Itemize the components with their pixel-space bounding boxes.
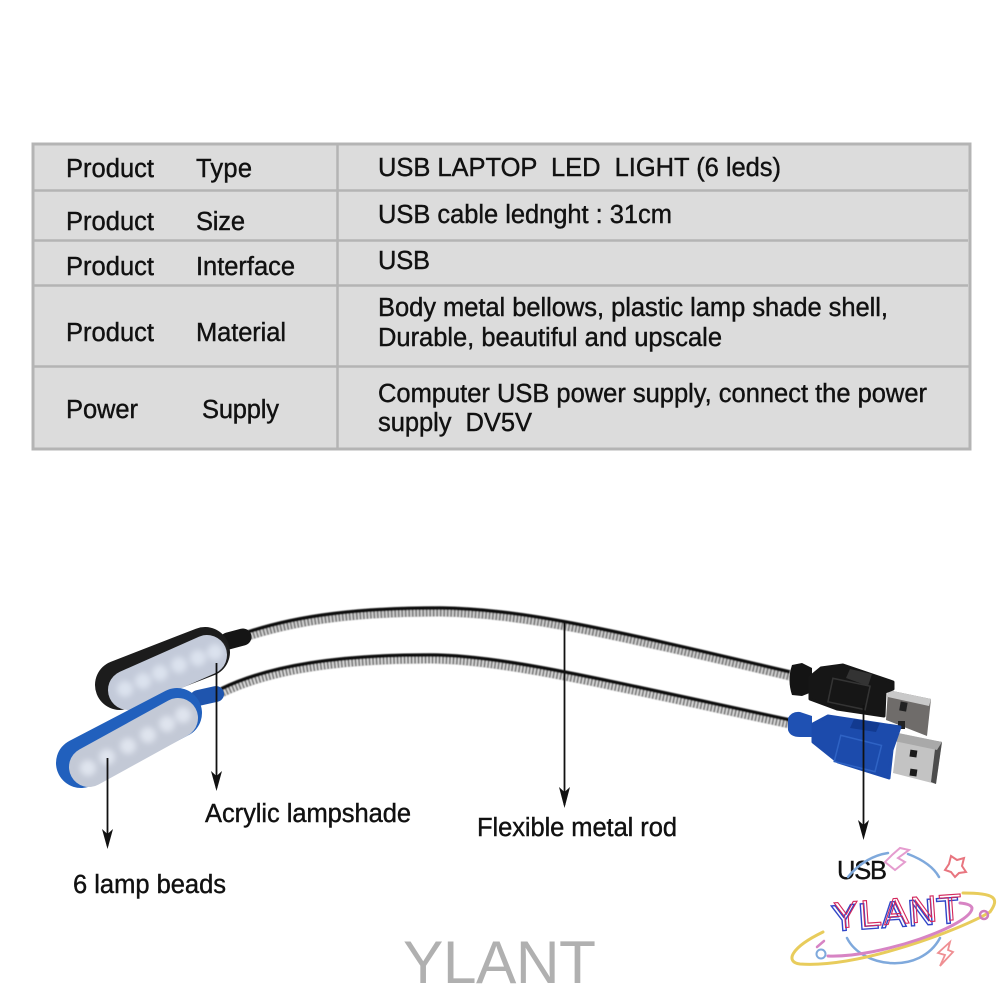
- row: power supply: supply DV5V: [378, 409, 532, 437]
- row: product interface: Interface: [196, 253, 295, 281]
- row: product type: Type: [196, 155, 252, 183]
- row: product material: Product: [66, 319, 154, 347]
- row: product type: USB LAPTOP LED LIGHT (6 leds): [378, 154, 781, 182]
- arrow: 6 lamp beads: [102, 758, 113, 849]
- logo orbit rings: [792, 893, 995, 964]
- row: power supply: Power: [66, 396, 138, 424]
- arrow: USB: [858, 705, 869, 840]
- label: USB: USB: [837, 857, 887, 885]
- row: power supply: [66, 380, 928, 437]
- black lamp head: [117, 637, 243, 697]
- row: product size: Product: [66, 208, 154, 236]
- row: product material: [66, 294, 888, 352]
- row: power supply: Supply: [202, 396, 279, 424]
- row: product interface: [66, 247, 430, 281]
- logo wordmark: YLANT: [833, 886, 963, 936]
- blue USB plug: [788, 712, 942, 784]
- label: 6 lamp beads: 6 lamp beads: [73, 871, 226, 899]
- YLANT neon logo: [792, 848, 995, 966]
- black USB plug: [790, 663, 931, 736]
- row: product interface: USB: [378, 247, 430, 275]
- row: product size: USB cable lednght : 31cm: [378, 201, 672, 229]
- row: product interface: Product: [66, 253, 154, 281]
- row: product size: Size: [196, 208, 245, 236]
- label: flexible metal rod: Flexible metal rod: [477, 814, 677, 842]
- logo wordmark: YLANT: [830, 890, 960, 939]
- row: power supply: Computer USB power supply, connect the power: [378, 380, 928, 408]
- blue lamp head: [80, 694, 216, 776]
- row: product size: [66, 201, 672, 236]
- cable: blue lamp flexible metal rod: [221, 655, 790, 724]
- cable: black lamp flexible metal rod: [248, 608, 790, 676]
- spec table: [32, 144, 971, 449]
- row: product type: Product: [66, 155, 154, 183]
- logo arrow swirl: [885, 848, 909, 870]
- arrow: flexible metal rod: [559, 622, 570, 808]
- row: product material: Body metal bellows, plastic lamp shade shell,: [378, 294, 888, 322]
- label: acrylic lampshade: Acrylic lampshade: [205, 800, 411, 828]
- watermark: YLANT: [403, 928, 596, 996]
- row: product material: Durable, beautiful and upscale: [378, 324, 722, 352]
- row: product type: [66, 154, 781, 183]
- logo star: [945, 856, 966, 877]
- arrow: acrylic lampshade: [211, 663, 222, 791]
- logo planet arcs: [847, 853, 940, 963]
- row: product material: Material: [196, 319, 286, 347]
- logo lightning bolt: [938, 942, 953, 966]
